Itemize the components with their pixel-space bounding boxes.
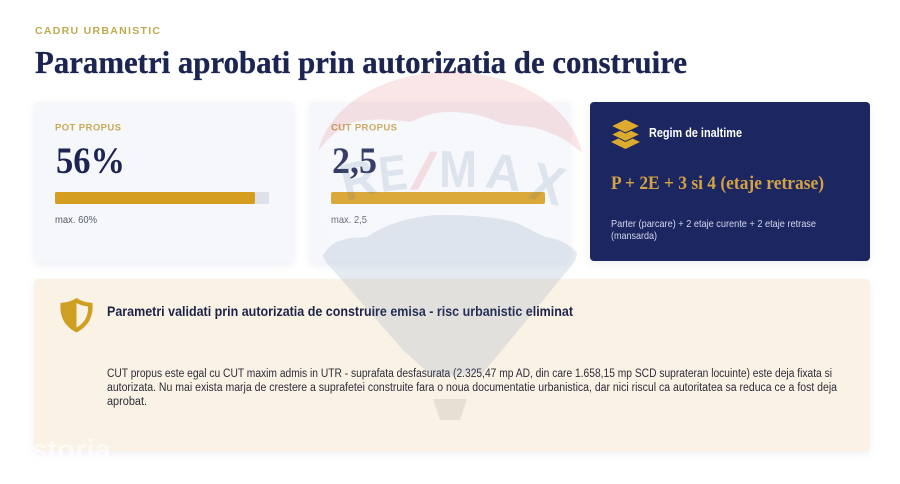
eyebrow label: CADRU URBANISTIC bbox=[35, 25, 160, 37]
RE/MAX logo letters: A bbox=[483, 142, 525, 202]
validation heading: Parametri validati prin autorizatia de construire emisa - risc urbanistic eliminat bbox=[107, 303, 573, 319]
POT value: 56% bbox=[56, 141, 125, 182]
height regime description: (mansarda) bbox=[611, 230, 657, 242]
RE/MAX logo letters: X bbox=[524, 151, 571, 218]
validation body text: CUT propus este egal cu CUT maxim admis in UTR - suprafata desfasurata (2.325,47 mp AD, din care 1.658,15 mp SCD suprateran locuinte) este deja fixata si bbox=[107, 368, 832, 380]
panel: CUT propus bbox=[310, 102, 570, 262]
balloon blue lower body bbox=[323, 215, 577, 377]
balloon basket bbox=[433, 399, 467, 420]
POT label: POT PROPUS bbox=[55, 122, 121, 134]
height regime value: P + 2E + 3 si 4 (etaje retrase) bbox=[611, 173, 824, 194]
RE/MAX logo letters: E bbox=[376, 144, 410, 203]
balloon white middle bbox=[318, 112, 582, 255]
RE/MAX logo letters: / bbox=[410, 143, 439, 201]
height regime description: Parter (parcare) + 2 etaje curente + 2 etaje retrase bbox=[611, 218, 816, 230]
RE/MAX logo letters: M bbox=[439, 141, 477, 199]
POT progress bar bbox=[55, 192, 269, 204]
CUT label: CUT PROPUS bbox=[331, 122, 397, 134]
panel: validated parameters bbox=[34, 279, 870, 451]
CUT progress bar bbox=[331, 192, 545, 204]
panel: POT propus bbox=[34, 102, 294, 262]
balloon red dome bbox=[318, 72, 582, 153]
POT maximum: max. 60% bbox=[55, 214, 97, 226]
RE/MAX logo letters: R bbox=[335, 148, 382, 213]
validation body text: autorizata. Nu mai exista marja de crestere a suprafetei construite fara o noua documentatie urbanistica, dar nici riscul ca autoritatea sa reduca ce a fost deja bbox=[107, 382, 838, 394]
panel: building height regime bbox=[590, 102, 870, 261]
validation body text: aprobat. bbox=[107, 396, 147, 408]
title: Parametri aprobati prin autorizatia de construire bbox=[35, 44, 687, 80]
height regime description bbox=[611, 218, 816, 242]
height regime heading: Regim de inaltime bbox=[649, 126, 742, 140]
icon: layers bbox=[611, 119, 640, 149]
RE/MAX logo letters bbox=[335, 141, 571, 218]
validation body text bbox=[107, 368, 838, 408]
icon: shield bbox=[60, 298, 93, 332]
CUT value: 2,5 bbox=[332, 141, 377, 182]
watermark: storia: storia bbox=[31, 434, 112, 464]
watermark: balloon logo bbox=[318, 72, 582, 420]
CUT maximum: max. 2,5 bbox=[331, 214, 367, 226]
